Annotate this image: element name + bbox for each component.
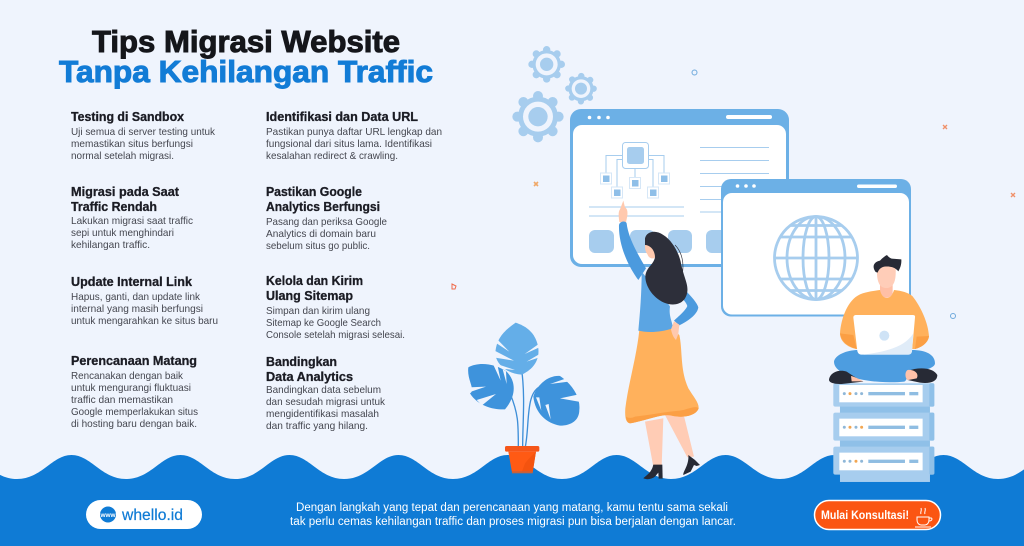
leaf: top xyxy=(493,323,541,375)
tip: Pastikan Google Analytics Berfungsi: Pastikan Google xyxy=(266,184,362,199)
tip: Bandingkan Data Analytics: Bandingkan data sebelum xyxy=(266,384,381,396)
tip: Identifikasi dan Data URL: Pastikan punya daftar URL lengkap dan xyxy=(266,126,442,138)
icon: www globe: www xyxy=(99,513,116,519)
upper body xyxy=(619,201,698,340)
title xyxy=(59,24,433,89)
tip: Migrasi pada Saat Traffic Rendah xyxy=(71,184,193,251)
tip: Testing di Sandbox: Testing di Sandbox xyxy=(71,109,185,124)
tip: Bandingkan Data Analytics: mengidentifikasi masalah xyxy=(266,408,379,420)
tip: Update Internal Link: Update Internal Link xyxy=(71,274,193,289)
leaf: left xyxy=(468,363,514,409)
figure: man with laptop xyxy=(829,255,937,384)
sitemap tree diagram xyxy=(600,142,670,198)
tip: Perencanaan Matang: Google memperlakukan situs xyxy=(71,406,198,418)
server unit 2 xyxy=(833,413,934,441)
tip: Testing di Sandbox: memastikan situs berfungsi xyxy=(71,138,193,150)
title: Tanpa Kehilangan Traffic xyxy=(59,54,433,89)
tip: Pastikan Google Analytics Berfungsi: sebelum situs go public. xyxy=(266,240,370,252)
tip: Identifikasi dan Data URL xyxy=(266,109,442,162)
tip: Perencanaan Matang: di hosting baru dengan baik. xyxy=(71,418,197,430)
tip: Perencanaan Matang: untuk mengurangi fluktuasi xyxy=(71,382,191,394)
tip: Kelola dan Kirim Ulang Sitemap: Simpan dan kirim ulang xyxy=(266,305,370,317)
closing message: Dengan langkah yang tepat dan perencanaan yang matang, kamu tentu sama sekali xyxy=(296,502,728,514)
tip: Pastikan Google Analytics Berfungsi xyxy=(266,184,387,252)
logo pill: whello.id xyxy=(121,507,183,524)
tip: Pastikan Google Analytics Berfungsi: Analytics Berfungsi xyxy=(266,199,380,214)
tip: Pastikan Google Analytics Berfungsi: Analytics di domain baru xyxy=(266,228,376,240)
tip: Migrasi pada Saat Traffic Rendah: kehilangan traffic. xyxy=(71,239,150,251)
tip: Perencanaan Matang xyxy=(71,353,198,430)
closing message: tak perlu cemas kehilangan traffic dan proses migrasi pun bisa berjalan dengan lancar. xyxy=(290,516,736,528)
tip: Update Internal Link: untuk mengarahkan ke situs baru xyxy=(71,315,218,327)
server unit 1 xyxy=(833,383,934,407)
tip: Identifikasi dan Data URL: fungsional dari situs lama. Identifikasi xyxy=(266,138,432,150)
tip: Bandingkan Data Analytics: dan sesudah migrasi untuk xyxy=(266,396,386,408)
wave footer background xyxy=(0,455,1024,546)
server unit 3 xyxy=(833,447,934,475)
tip: Perencanaan Matang: Rencanakan dengan baik xyxy=(71,370,184,382)
tip: Testing di Sandbox: normal setelah migrasi. xyxy=(71,150,174,162)
plant with pot xyxy=(468,323,581,447)
icon: gears xyxy=(517,50,594,137)
call to action button xyxy=(814,500,940,530)
server stack xyxy=(833,383,934,482)
tip: Migrasi pada Saat Traffic Rendah: Migrasi pada Saat xyxy=(71,184,180,199)
tip: Update Internal Link xyxy=(71,274,218,327)
tip: Bandingkan Data Analytics: Data Analytics xyxy=(266,369,353,384)
tip: Testing di Sandbox xyxy=(71,109,216,162)
tip: Kelola dan Kirim Ulang Sitemap xyxy=(266,273,405,341)
tip: Perencanaan Matang: traffic dan memastikan xyxy=(71,394,173,406)
icon: globe xyxy=(774,216,858,300)
figure: woman pointing xyxy=(619,201,700,479)
title: Tips Migrasi Website xyxy=(92,24,400,59)
browser window: sitemap xyxy=(570,109,789,267)
tip: Kelola dan Kirim Ulang Sitemap: Sitemap ke Google Search xyxy=(266,317,381,329)
tip: Migrasi pada Saat Traffic Rendah: sepi untuk menghindari xyxy=(71,227,174,239)
tip: Bandingkan Data Analytics xyxy=(266,354,386,432)
tip: Kelola dan Kirim Ulang Sitemap: Kelola dan Kirim xyxy=(266,273,363,288)
laptop xyxy=(853,315,915,355)
decorative markers xyxy=(452,70,1015,318)
tip: Update Internal Link: internal yang masih berfungsi xyxy=(71,303,203,315)
tip: Kelola dan Kirim Ulang Sitemap: Ulang Sitemap xyxy=(266,288,353,303)
tip: Bandingkan Data Analytics: dan traffic yang hilang. xyxy=(266,420,368,432)
tip: Kelola dan Kirim Ulang Sitemap: Console setelah migrasi selesai. xyxy=(266,329,405,341)
closing message xyxy=(290,502,736,528)
tip: Perencanaan Matang: Perencanaan Matang xyxy=(71,353,197,368)
icon: coffee cup xyxy=(915,508,932,527)
tip: Identifikasi dan Data URL: kesalahan redirect & crawling. xyxy=(266,150,398,162)
tip: Testing di Sandbox: Uji semua di server testing untuk xyxy=(71,126,216,138)
tip: Pastikan Google Analytics Berfungsi: Pasang dan periksa Google xyxy=(266,216,387,228)
browser window: globe xyxy=(721,179,911,316)
logo pill xyxy=(86,500,202,529)
tip: Identifikasi dan Data URL: Identifikasi dan Data URL xyxy=(266,109,418,124)
plant pot xyxy=(505,446,539,473)
call to action button: Mulai Konsultasi! xyxy=(821,510,909,522)
tip: Migrasi pada Saat Traffic Rendah: Traffic Rendah xyxy=(71,199,157,214)
tip: Update Internal Link: Hapus, ganti, dan update link xyxy=(71,291,201,303)
tip: Migrasi pada Saat Traffic Rendah: Lakukan migrasi saat traffic xyxy=(71,215,193,227)
tip: Bandingkan Data Analytics: Bandingkan xyxy=(266,354,337,369)
leaf: right xyxy=(533,376,581,426)
